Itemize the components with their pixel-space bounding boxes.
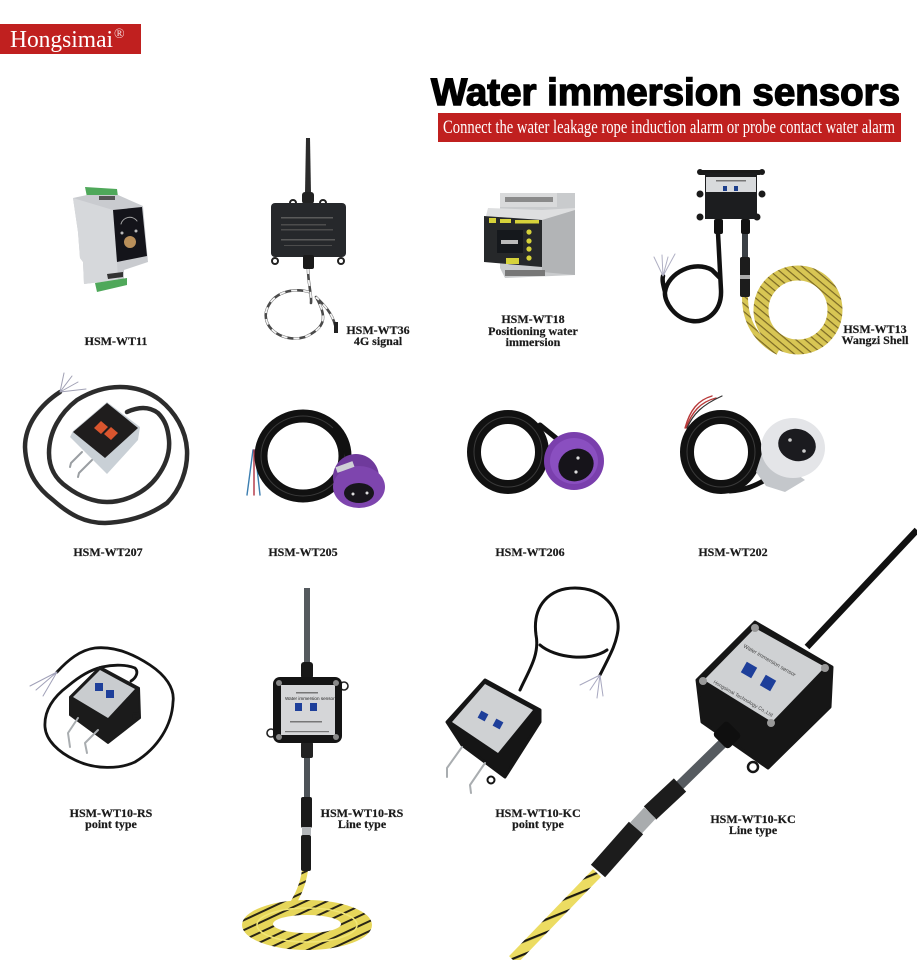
product: HSM-WT10-KC line type [513,530,917,960]
product: HSM-WT10-KC point type [447,588,618,793]
product: HSM-WT202 [685,396,825,492]
product: HSM-WT36 4G sensor [266,138,346,338]
label: HSM-WT18: HSM-WT18 [501,312,565,326]
logo badge: Hongsimai: ® [114,27,125,42]
logo badge: Hongsimai: Hongsimai [10,27,113,53]
logo badge: Hongsimai [0,24,141,54]
label: HSM-WT18: immersion [506,335,561,349]
product: HSM-WT13 rope sensor [654,169,835,352]
label: HSM-WT36 4G signal [346,323,410,348]
label: HSM-WT18: Positioning water [488,324,578,338]
product: HSM-WT10-KC line type: Hongsimai Technology Co.,Ltd [712,680,774,719]
label: HSM-WT36 4G signal: HSM-WT36 [346,323,410,337]
label: HSM-WT13 Wangzi Shell [841,322,909,347]
product: HSM-WT207 [25,373,187,523]
subtitle banner [438,113,901,142]
label: HSM-WT10-KC point type: point type [512,817,565,831]
label: HSM-WT18 [488,312,578,349]
product: HSM-WT10-RS line type: Water immersion sensor [285,696,335,701]
label: HSM-WT10-RS point type: HSM-WT10-RS [70,806,153,820]
product: HSM-WT11 DIN rail module [73,187,148,292]
label: HSM-WT10-RS point type [70,806,153,831]
label: HSM-WT11: HSM-WT11 [85,334,147,348]
product: HSM-WT18 positioning module [484,193,575,278]
label: HSM-WT10-RS line type: HSM-WT10-RS [321,806,404,820]
label: HSM-WT10-KC line type: HSM-WT10-KC [710,812,796,826]
label: HSM-WT207: HSM-WT207 [73,545,143,559]
product: HSM-WT10-RS point type [30,648,173,767]
label: HSM-WT10-RS point type: point type [85,817,138,831]
product: HSM-WT206 [474,417,604,490]
product: HSM-WT10-RS line type [242,588,372,950]
label: HSM-WT10-KC point type: HSM-WT10-KC [495,806,581,820]
label: HSM-WT10-KC point type [495,806,581,831]
label: HSM-WT13 Wangzi Shell: Wangzi Shell [841,333,909,347]
label: HSM-WT10-KC line type [710,812,796,837]
label: HSM-WT206: HSM-WT206 [495,545,565,559]
title: Water immersion sensors [431,72,900,114]
product: HSM-WT205 [247,416,385,508]
label: HSM-WT10-RS line type: Line type [338,817,387,831]
label: HSM-WT13 Wangzi Shell: HSM-WT13 [843,322,907,336]
product: HSM-WT10-KC line type: Water immersion sensor [742,644,797,679]
label: HSM-WT10-RS line type [321,806,404,831]
label: HSM-WT36 4G signal: 4G signal [354,334,403,348]
label: HSM-WT205: HSM-WT205 [268,545,338,559]
label: HSM-WT10-KC line type: Line type [729,823,778,837]
label: HSM-WT202: HSM-WT202 [698,545,768,559]
